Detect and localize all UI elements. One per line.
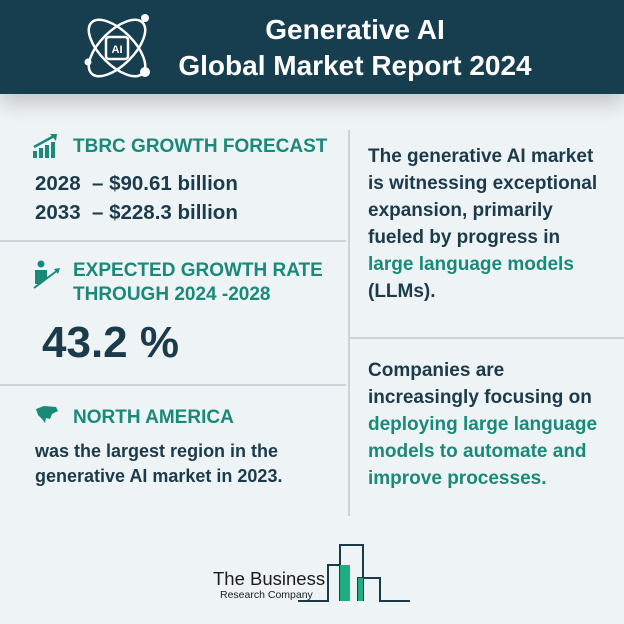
heading: THROUGH 2024 -2028	[73, 284, 270, 305]
text block: market expansion: expansion, primarily	[368, 200, 553, 221]
forecast values	[35, 172, 238, 224]
text block: companies	[368, 360, 597, 489]
description: was the largest region in the	[35, 441, 278, 461]
icon: map	[36, 406, 58, 423]
icon: AI atom: AI	[112, 44, 122, 56]
heading: EXPECTED GROWTH RATE	[73, 260, 323, 281]
forecast values: 2033 – $228.3 billion	[35, 201, 238, 224]
text block: market expansion: (LLMs).	[368, 281, 436, 302]
icon: person growth	[34, 260, 60, 289]
text block: companies: Companies are	[368, 360, 504, 381]
icon: AI atom	[84, 14, 150, 78]
heading: TBRC GROWTH FORECAST	[73, 136, 327, 157]
heading: NORTH AMERICA	[73, 407, 234, 428]
text block: companies: improve processes.	[368, 468, 546, 489]
panel: growth forecast	[33, 134, 328, 224]
heading	[73, 260, 323, 305]
text block: market expansion	[368, 146, 597, 302]
logo	[213, 544, 410, 602]
text block: market expansion: is witnessing exceptional	[368, 173, 597, 194]
title: Global Market Report 2024	[178, 50, 532, 81]
panel: growth rate	[34, 260, 323, 367]
big number: 43.2 %	[42, 318, 179, 367]
icon: bar chart	[33, 134, 57, 158]
text block: market expansion: large language models	[368, 254, 574, 275]
title: Generative AI	[265, 14, 445, 45]
text block: market expansion: The generative AI market	[368, 146, 593, 167]
header banner	[0, 0, 624, 94]
text block: companies: models to automate and	[368, 441, 587, 462]
panel: north america	[35, 406, 282, 486]
title	[178, 14, 532, 81]
description	[35, 441, 282, 486]
text block: companies: deploying large language	[368, 414, 597, 435]
logo text: The Business	[213, 568, 325, 589]
description: generative AI market in 2023.	[35, 466, 282, 486]
forecast values: 2028 – $90.61 billion	[35, 172, 238, 195]
text block: market expansion: fueled by progress in	[368, 227, 560, 248]
logo: Research Company	[220, 589, 313, 601]
text block: companies: increasingly focusing on	[368, 387, 592, 408]
